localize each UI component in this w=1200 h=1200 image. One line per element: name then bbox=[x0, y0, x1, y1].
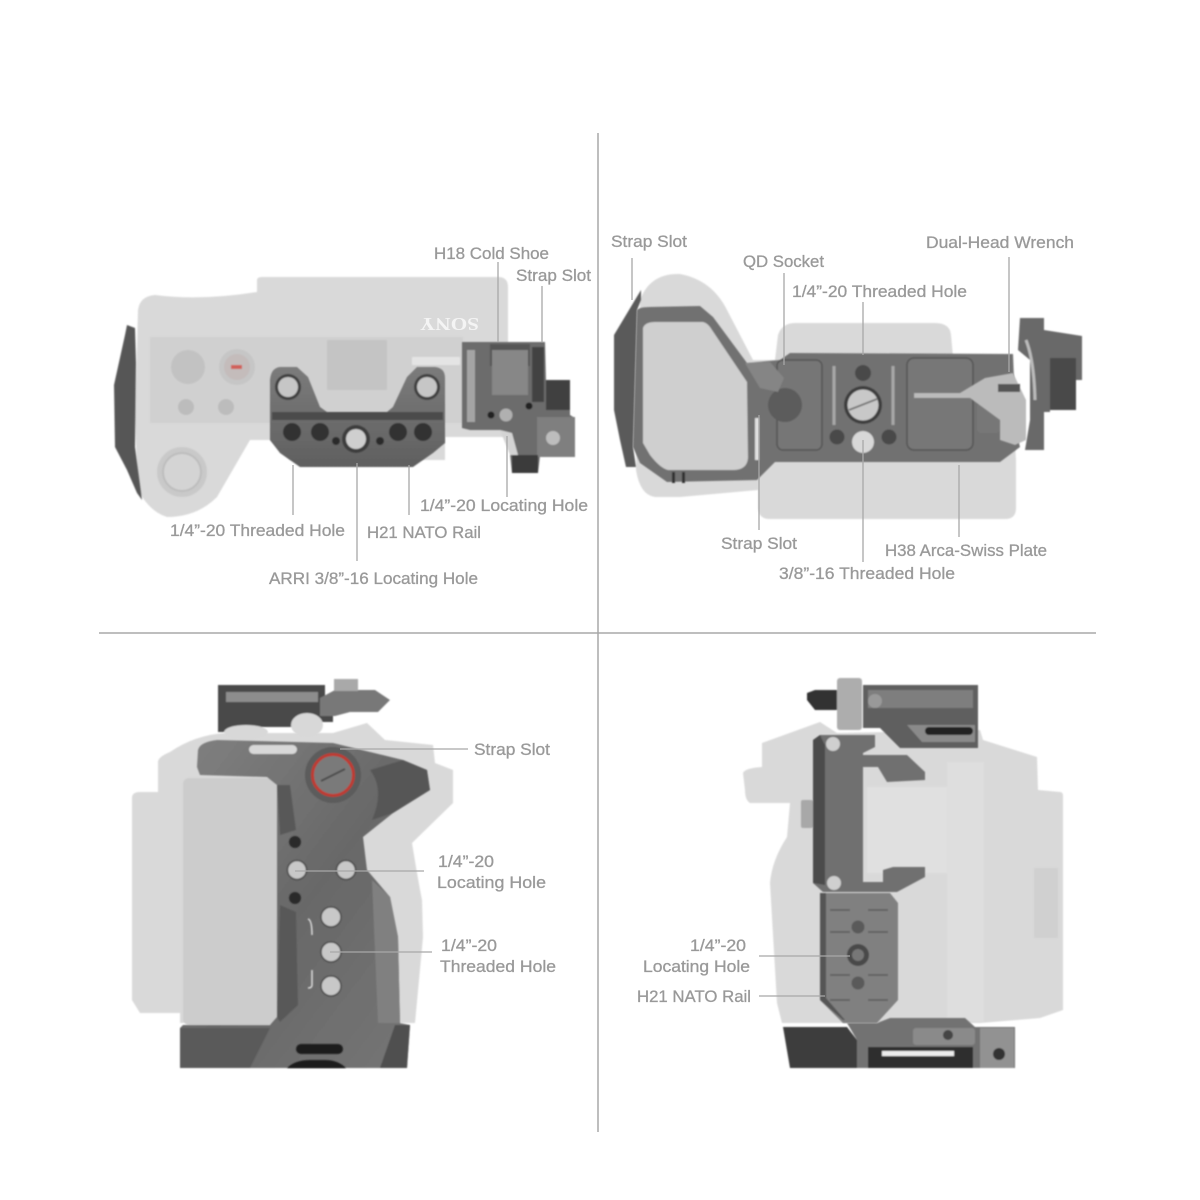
label: 1/4"-20 Locating Hole bbox=[437, 852, 546, 892]
H18 cold shoe bracket bbox=[462, 342, 575, 473]
vertical divider bbox=[597, 133, 599, 1132]
camera body, port side bbox=[743, 722, 1063, 1023]
H21 NATO rail bbox=[270, 367, 445, 467]
label: Strap Slot: Strap Slot bbox=[611, 232, 687, 251]
camera body, top view bbox=[135, 277, 508, 517]
label: Strap Slot: Strap Slot bbox=[516, 266, 591, 285]
panel: top view bbox=[114, 244, 591, 588]
label: H21 NATO Rail: H21 NATO Rail bbox=[367, 523, 481, 542]
label: ARRI 3/8"-16 Locating Hole: ARRI 3/8”-16 Locating Hole bbox=[269, 569, 478, 588]
label: 1/4"-20 Threaded Hole: 1/4”-20 Threaded Hole bbox=[170, 521, 345, 540]
label: 1/4"-20 Locating Hole: Locating Hole bbox=[643, 957, 750, 976]
leader lines, bottom view bbox=[632, 257, 1009, 562]
label: H18 Cold Shoe: H18 Cold Shoe bbox=[434, 244, 549, 263]
side plate, bottom view bbox=[614, 290, 641, 467]
side grip plate bbox=[114, 325, 142, 500]
label: 1/4"-20 Locating Hole bbox=[643, 936, 750, 976]
label: 3/8"-16 Threaded Hole: 3/8”-16 Threaded Hole bbox=[779, 564, 955, 583]
label: H21 NATO Rail: H21 NATO Rail bbox=[637, 987, 751, 1006]
label: 1/4"-20 Locating Hole: Locating Hole bbox=[437, 873, 546, 892]
panel: left side view bbox=[637, 678, 1063, 1068]
top cold shoe block bbox=[807, 678, 978, 748]
knob with red ring bbox=[305, 747, 361, 803]
H21 NATO rail, side view bbox=[820, 893, 898, 1023]
cage side plate and handle bbox=[180, 740, 430, 1068]
label: 1/4"-20 Locating Hole: 1/4”-20 bbox=[438, 852, 494, 871]
camera body, bottom view bbox=[636, 274, 1016, 519]
mounting holes bbox=[287, 836, 356, 1068]
label: H38 Arca-Swiss Plate: H38 Arca-Swiss Plate bbox=[885, 541, 1047, 560]
dual-head wrench bbox=[914, 373, 1026, 445]
label: 1/4"-20 Locating Hole: 1/4”-20 Locating Hole bbox=[420, 496, 588, 515]
side bracket, bottom view bbox=[1018, 318, 1082, 450]
cage plate frame bbox=[633, 306, 1020, 483]
label: QD Socket: QD Socket bbox=[743, 252, 824, 271]
horizontal divider bbox=[99, 632, 1096, 634]
logo on camera: SONY bbox=[420, 314, 479, 334]
label: Strap Slot: Strap Slot bbox=[474, 740, 550, 759]
label: 1/4"-20 Threaded Hole: 1/4”-20 bbox=[441, 936, 497, 955]
top clamp assembly bbox=[218, 679, 390, 739]
label: 1/4"-20 Locating Hole: 1/4”-20 bbox=[690, 936, 746, 955]
panel: bottom view bbox=[611, 232, 1082, 583]
label: Strap Slot: Strap Slot bbox=[721, 534, 797, 553]
label: 1/4"-20 Threaded Hole: 1/4”-20 Threaded Hole bbox=[792, 282, 967, 301]
camera body, grip side bbox=[132, 723, 453, 1025]
label: 1/4"-20 Threaded Hole bbox=[440, 936, 556, 976]
leader lines, left side view bbox=[759, 956, 850, 996]
label: 1/4"-20 Threaded Hole: Threaded Hole bbox=[440, 957, 556, 976]
vertical clamp bracket bbox=[801, 735, 925, 892]
leader lines, right side view bbox=[295, 749, 468, 952]
bottom mount bbox=[783, 1018, 1015, 1068]
label: Dual-Head Wrench: Dual-Head Wrench bbox=[926, 233, 1074, 252]
leader lines, top view bbox=[293, 262, 542, 561]
panel: right side view bbox=[132, 679, 556, 1068]
